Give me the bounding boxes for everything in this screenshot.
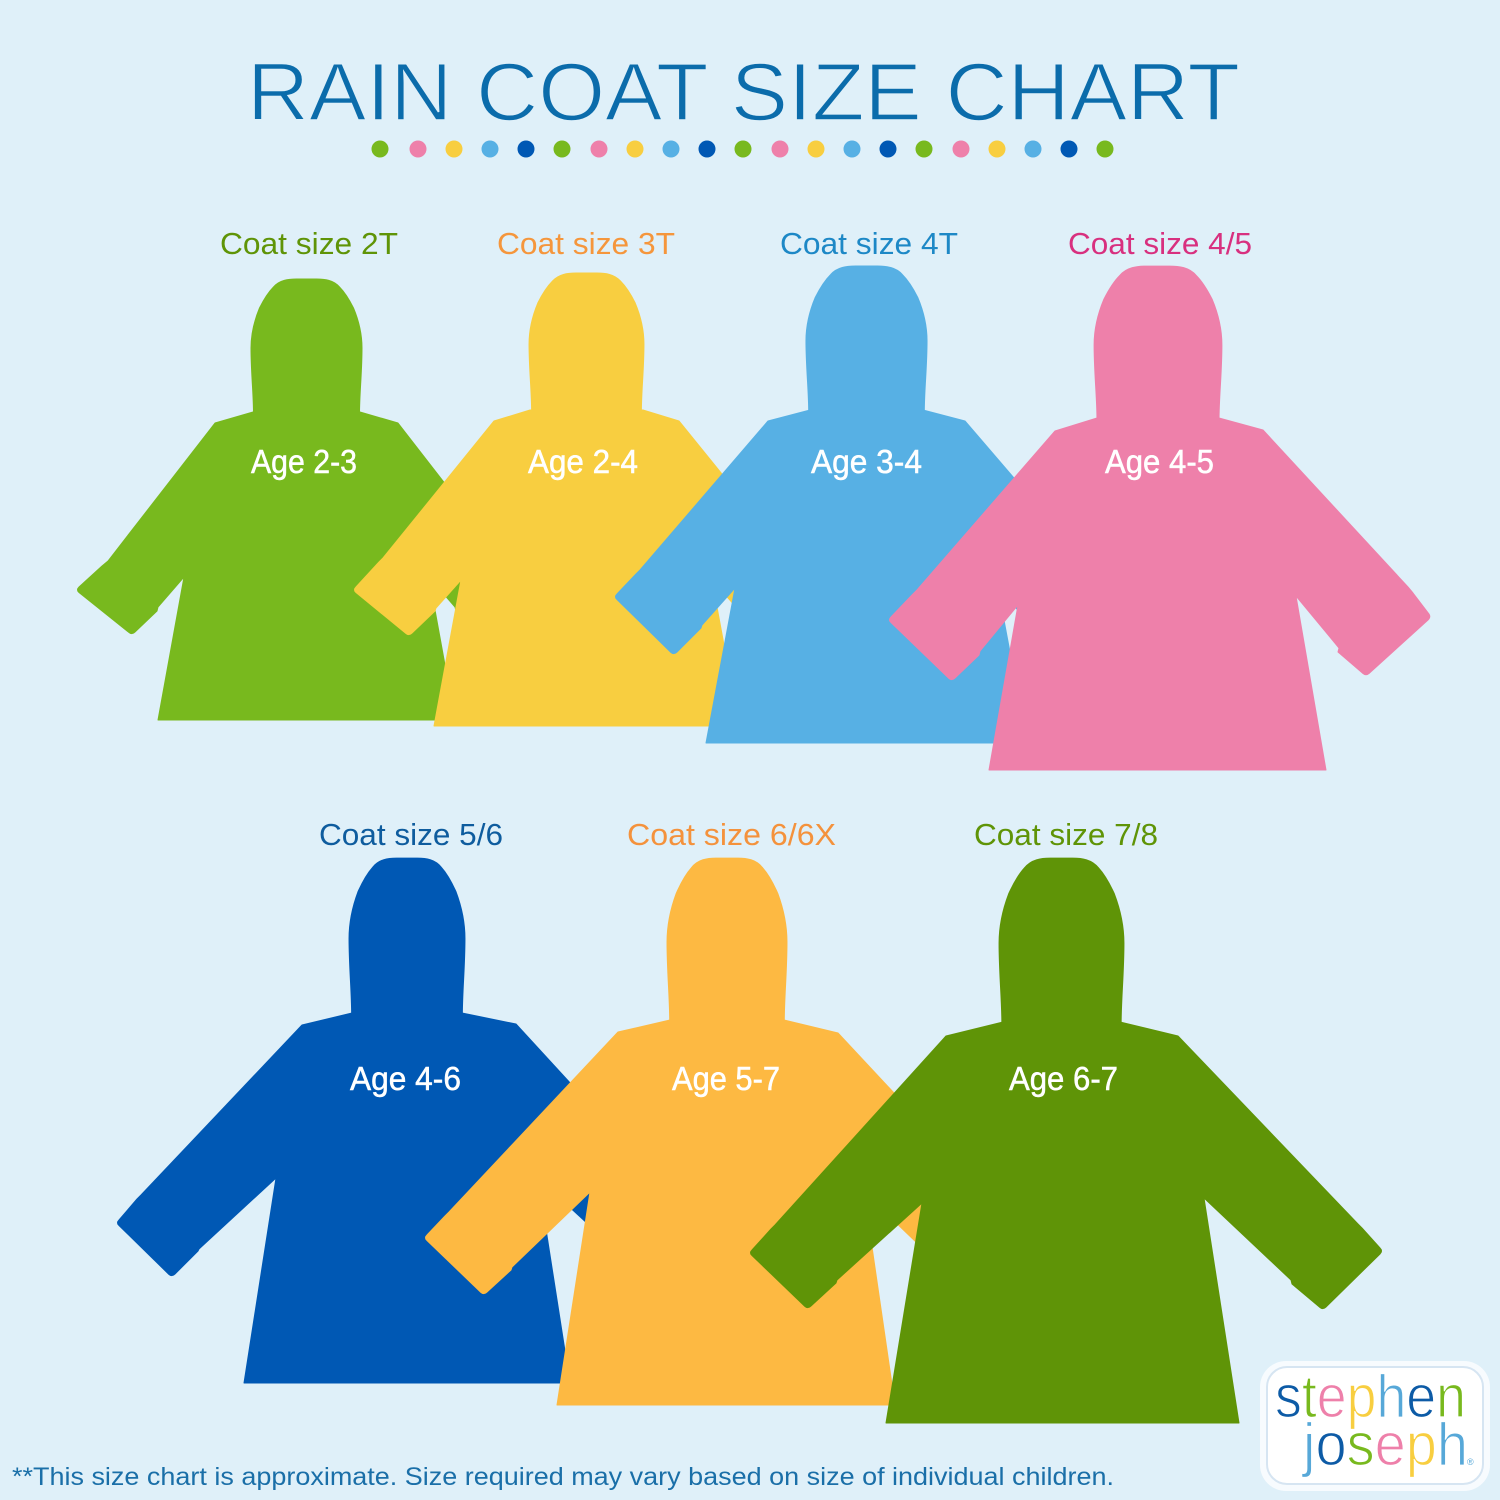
label: coat size 4T: Coat size 4T <box>780 226 958 261</box>
label: age 2-3: Age 2-3 <box>251 443 357 480</box>
label: age 3-4: Age 3-4 <box>811 443 922 480</box>
coat: size 5/6 <box>118 858 696 1383</box>
label: age 6-7: Age 6-7 <box>1009 1060 1118 1097</box>
label: age 4-5: Age 4-5 <box>1105 443 1214 480</box>
label: coat size 7/8: Coat size 7/8 <box>974 817 1158 852</box>
logo: stephen joseph <box>1260 1361 1490 1491</box>
coat: size 4T <box>616 266 1118 743</box>
coat: size 3T <box>354 273 818 726</box>
coat: size 7/8 <box>750 858 1382 1423</box>
title: RAIN COAT SIZE CHART <box>247 47 1240 138</box>
coat: size 4/5 <box>890 266 1430 770</box>
logo: stephen joseph: stephen <box>1275 1363 1466 1430</box>
label: coat size 6/6X: Coat size 6/6X <box>627 817 836 852</box>
logo: stephen joseph: joseph <box>1301 1411 1468 1478</box>
coat: size 6/6X <box>426 858 1028 1405</box>
logo: stephen joseph: ® <box>1467 1457 1474 1467</box>
label: coat size 3T: Coat size 3T <box>497 226 675 261</box>
coat: size 2T <box>78 279 536 720</box>
dotted divider <box>372 140 1114 158</box>
label: age 5-7: Age 5-7 <box>672 1060 780 1097</box>
label: coat size 5/6: Coat size 5/6 <box>319 817 503 852</box>
label: coat size 2T: Coat size 2T <box>220 226 398 261</box>
label: age 2-4: Age 2-4 <box>528 443 638 480</box>
label: coat size 4/5: Coat size 4/5 <box>1068 226 1252 261</box>
footnote: **This size chart is approximate. Size required may vary based on size of individual children. <box>12 1463 1114 1491</box>
label: age 4-6: Age 4-6 <box>350 1060 461 1097</box>
